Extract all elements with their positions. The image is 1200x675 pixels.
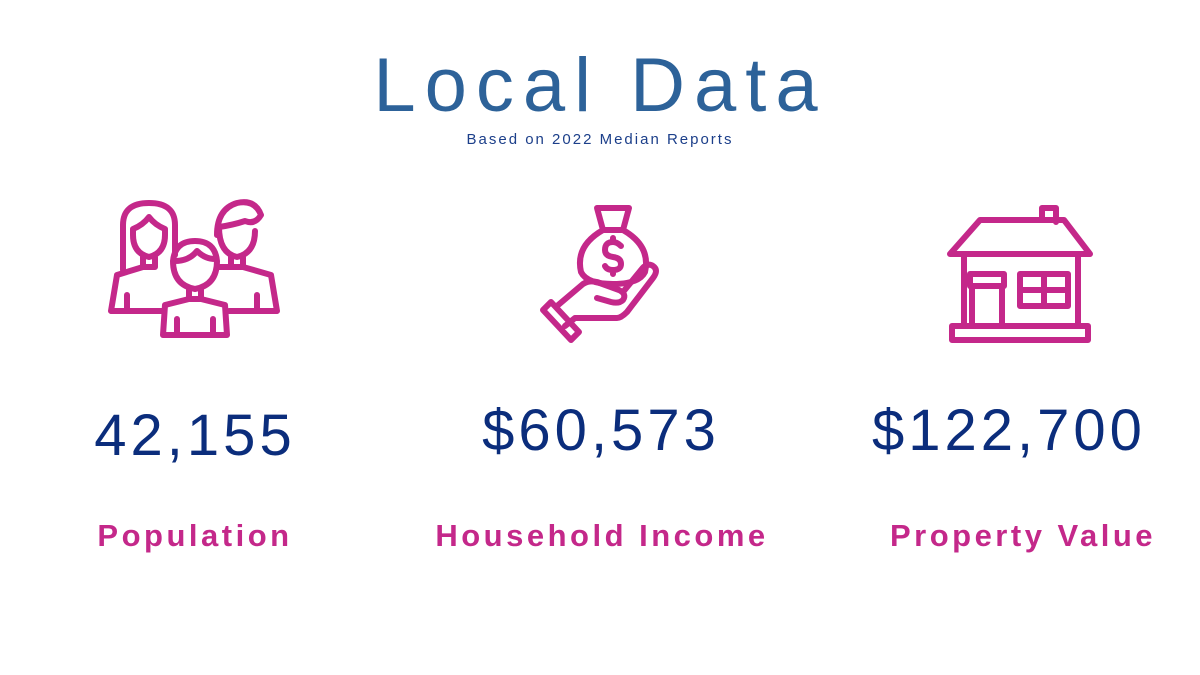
number: population: 42,155	[94, 403, 296, 468]
stat: population	[94, 403, 296, 553]
number: property value: $122,700	[872, 398, 1146, 463]
number: household income: $60,573	[482, 398, 720, 463]
label: household income: Household Income	[435, 518, 769, 553]
icon: house	[947, 205, 1093, 343]
stat: household income	[435, 398, 769, 553]
label: property value: Property Value	[890, 518, 1156, 553]
icon: family	[108, 199, 280, 338]
title: Local Data	[373, 43, 827, 128]
subtitle: Based on 2022 Median Reports	[466, 131, 733, 148]
stat: property value	[872, 398, 1156, 553]
icon: money hand	[540, 205, 659, 343]
label: population: Population	[97, 518, 293, 553]
